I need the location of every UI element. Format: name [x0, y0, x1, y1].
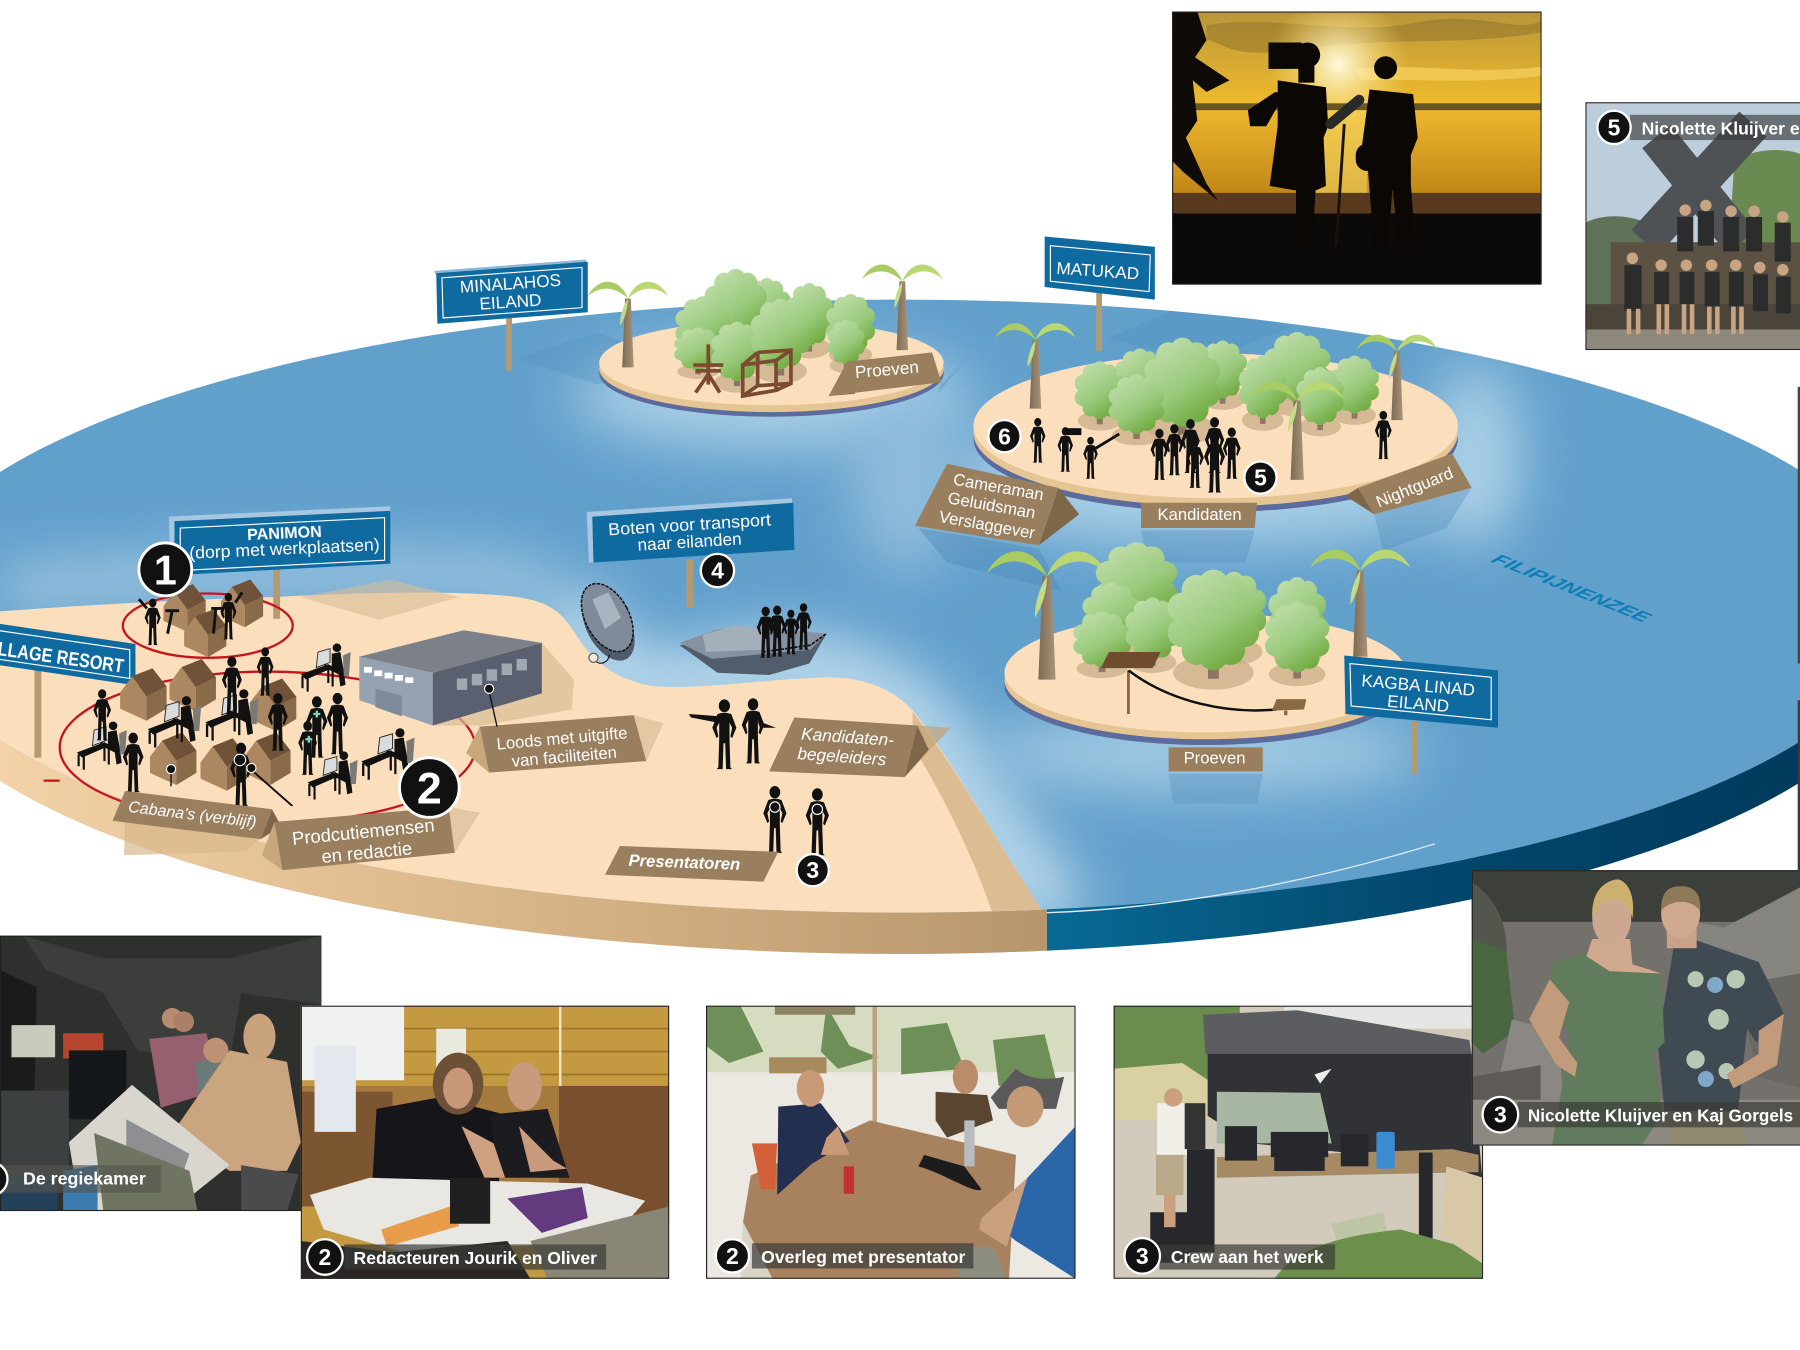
sign: Panimon: PANIMON [247, 523, 322, 544]
sign posts [34, 293, 1418, 774]
island: Kagba Linad [987, 542, 1411, 804]
red zone rings [44, 593, 475, 823]
label: Proeven [1169, 747, 1263, 804]
sign: Kagba Linad eiland [1344, 655, 1498, 728]
sign: Kagba Linad eiland: KAGBA LINAD [1361, 670, 1476, 700]
photo edge strips at right [1798, 387, 1800, 871]
label: Kandidaten: Kandidaten [1158, 505, 1242, 524]
photo: control room [0, 936, 322, 1212]
label: Productiemensen en redactie [247, 763, 480, 870]
caption: Nicolette Kluijver en Kaj Gorgels [1483, 1097, 1800, 1132]
caption: De regiekamer: De regiekamer [23, 1169, 146, 1189]
sign: Minalahos eiland [434, 259, 588, 324]
tree cluster [1073, 542, 1329, 690]
crew boat [680, 603, 827, 675]
label: Productiemensen en redactie: Prodcutiemensen [291, 814, 435, 849]
label: Cameraman Geluidsman Verslaggever: Cameraman [952, 470, 1045, 504]
label: Cameraman Geluidsman Verslaggever: Geluidsman [946, 488, 1037, 522]
photo: editors Jourik and Oliver [300, 1006, 670, 1279]
sign: Minalahos eiland: EILAND [479, 290, 542, 314]
sign: Panimon [169, 506, 390, 577]
sign: Minalahos eiland: MINALAHOS [459, 270, 562, 297]
photo: Nicolette Kluijver and Kaj Gorgels [1472, 870, 1800, 1146]
warehouse [359, 630, 574, 726]
badge 6: 6 [998, 423, 1011, 449]
label: Cabana's (verblijf) [112, 765, 281, 855]
obstacle frames [693, 344, 791, 396]
island: Matukad [915, 323, 1472, 591]
badge 5: 5 [1254, 465, 1267, 491]
island: Minalahos [588, 265, 964, 417]
label: Loods met uitgifte van faciliteiten: van faciliteiten [511, 743, 618, 771]
label: Loods met uitgifte van faciliteiten: Loods met uitgifte [496, 723, 628, 754]
presenter silhouettes [763, 786, 829, 855]
sign: Boten voor transport [587, 498, 794, 562]
badge 3: 3 [806, 857, 819, 883]
caption: Nicolette Kluijver: 5 [1608, 114, 1621, 140]
photo: sunset camera crew [1172, 12, 1542, 285]
label: Presentatoren: Presentatoren [628, 851, 741, 874]
caption: Crew aan het werk: Crew aan het werk [1171, 1247, 1324, 1267]
label: Nightguard: Nightguard [1373, 463, 1456, 511]
water highlight line [1047, 844, 1435, 913]
tree cluster [674, 269, 875, 393]
caption: Nicolette Kluijver en Kaj Gorgels: 3 [1494, 1102, 1507, 1128]
label: Proeven: Proeven [854, 357, 920, 382]
badge 4: 4 [711, 558, 724, 584]
boat moored at the beach [571, 575, 645, 669]
palm trees [987, 550, 1411, 680]
badge 2: 2 [417, 764, 442, 814]
caption: Redacteuren Jourik en Oliver [307, 1239, 606, 1275]
nightguard silhouette [1375, 411, 1392, 459]
label: Proeven: Proeven [1184, 748, 1246, 767]
sign: Kagba Linad eiland: EILAND [1386, 691, 1450, 716]
hammock [1101, 652, 1306, 715]
tree cluster [1075, 332, 1379, 445]
sign: Village Resort [0, 622, 135, 685]
sign: Panimon: (dorp met werkplaatsen) [189, 534, 380, 563]
caption: Redacteuren Jourik en Oliver: Redacteuren Jourik en Oliver [354, 1248, 597, 1268]
label: Nightguard [1345, 453, 1472, 551]
label: Kandidaten-begeleiders: Kandidaten- [801, 724, 895, 750]
label: Kandidaten-begeleiders [769, 717, 951, 777]
caption: Redacteuren Jourik en Oliver: 2 [318, 1244, 331, 1270]
caption: Overleg met presentator: 2 [726, 1243, 739, 1269]
candidate guides silhouettes [689, 698, 776, 769]
sign: Matukad: MATUKAD [1056, 258, 1140, 284]
boat crew silhouettes [757, 603, 812, 658]
photo: meeting with presenter [706, 1006, 1076, 1279]
village cabins [120, 579, 296, 791]
caption: Nicolette Kluijver [1597, 111, 1800, 144]
label: Cameraman Geluidsman Verslaggever [915, 464, 1079, 591]
palm tree centre [1251, 381, 1343, 480]
label: Productiemensen en redactie: en redactie [321, 837, 413, 867]
badge 4 [701, 554, 734, 587]
sign: Matukad [1045, 236, 1155, 300]
label: Proeven [829, 352, 964, 396]
land mass: beach [0, 580, 1047, 930]
caption: Nicolette Kluijver en Kaj Gorgels: Nicolette Kluijver en Kaj Gorgels [1528, 1106, 1793, 1126]
label: Loods met uitgifte van faciliteiten [466, 684, 664, 773]
sea name: FILIPIJNENZEE [1487, 551, 1656, 625]
caption: De regiekamer [0, 1162, 161, 1196]
candidates silhouettes [1151, 417, 1241, 492]
caption: Crew aan het werk [1124, 1238, 1335, 1274]
label: Cabana's (verblijf): Cabana's (verblijf) [127, 798, 257, 831]
badge 1 [139, 543, 192, 596]
caption: Crew aan het werk: 3 [1136, 1243, 1149, 1269]
production silhouettes [93, 647, 348, 806]
crew silhouettes [1030, 418, 1119, 479]
photo: contestants with X [1585, 102, 1800, 350]
label: Kandidaten [1141, 503, 1257, 562]
label: Presentatoren [605, 846, 778, 882]
badge 2 [399, 758, 459, 817]
photo: crew at work [1114, 1006, 1484, 1279]
badge 3 [797, 854, 829, 886]
disc rim: sand edge [0, 740, 1798, 954]
label: Cameraman Geluidsman Verslaggever: Verslaggever [938, 507, 1037, 543]
badge 1: 1 [154, 547, 177, 593]
sign: Boten voor transport: naar eilanden [637, 528, 742, 555]
production desks [77, 643, 415, 800]
workshop silhouettes [139, 592, 242, 645]
caption: Overleg met presentator [716, 1239, 973, 1273]
palm trees [588, 265, 942, 367]
badge 5 [1244, 461, 1277, 494]
sign: Boten voor transport: Boten voor transport [608, 509, 772, 539]
palm trees [995, 323, 1437, 420]
sea surface with light shading [0, 293, 1800, 918]
label: Kandidaten-begeleiders: begeleiders [797, 743, 887, 769]
caption: Overleg met presentator: Overleg met presentator [761, 1247, 966, 1267]
badge 6 [988, 420, 1021, 452]
